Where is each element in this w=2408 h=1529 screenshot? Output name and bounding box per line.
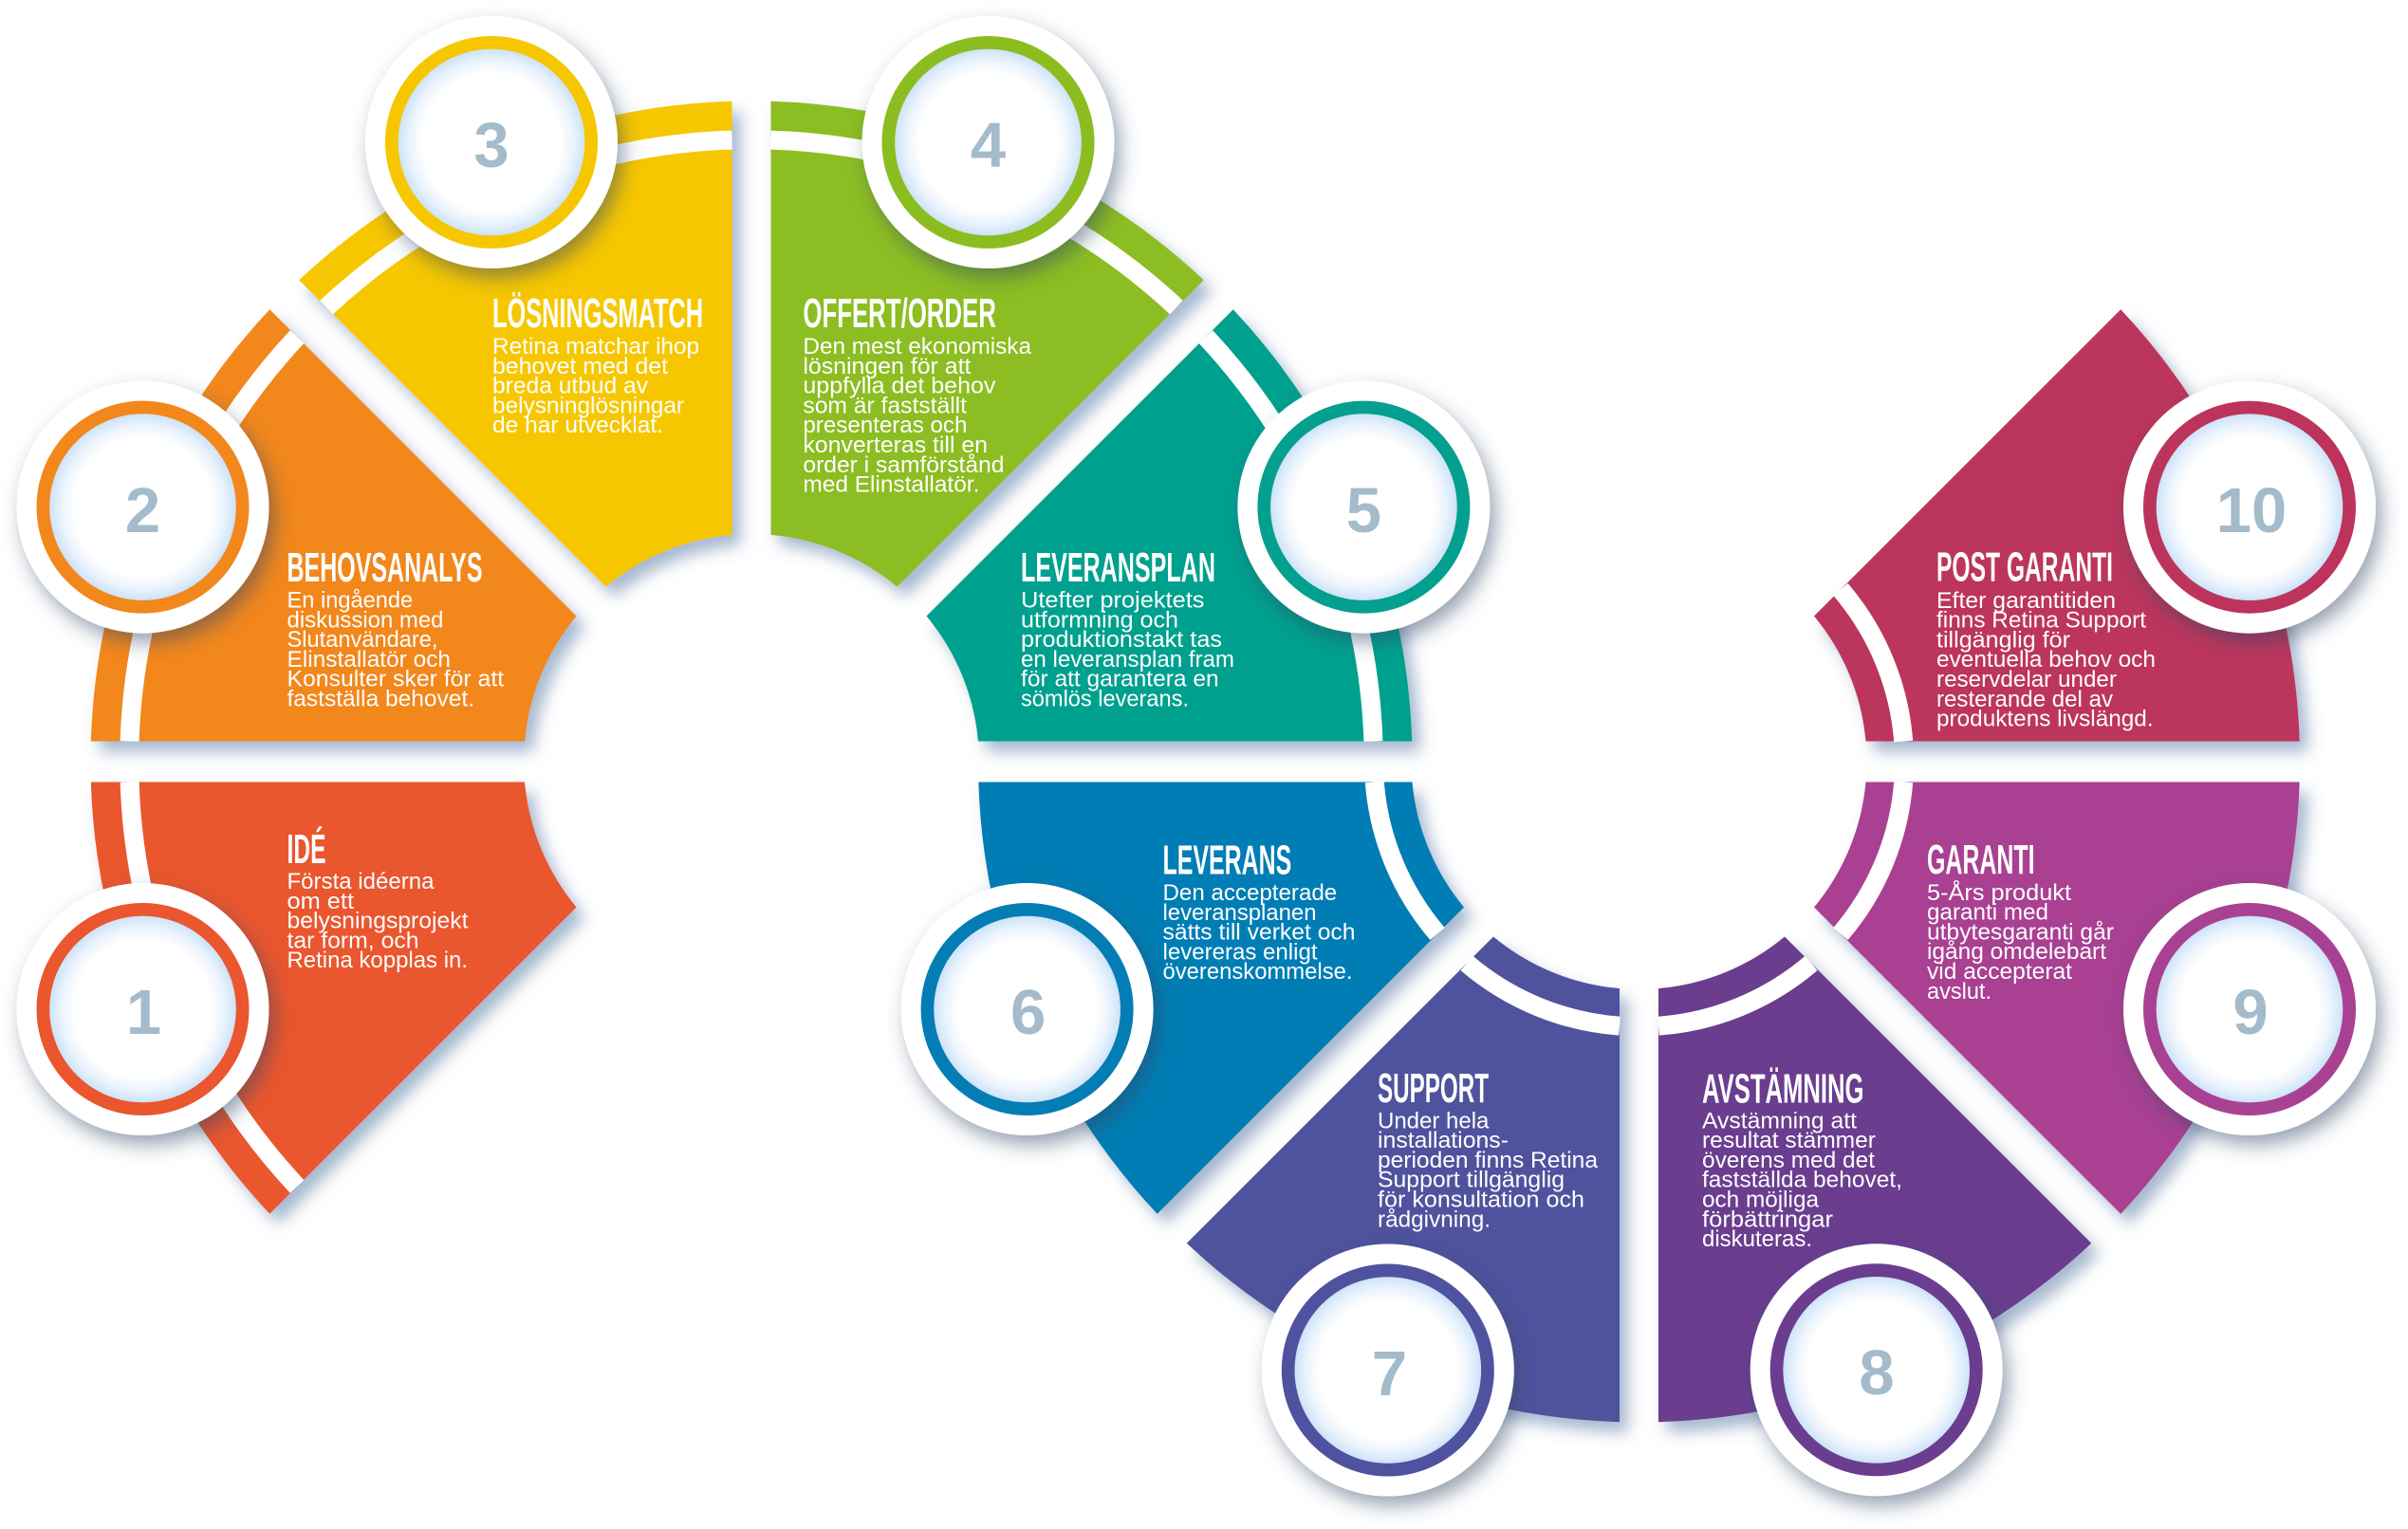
text block: Garanti description: avslut.: [1927, 979, 1991, 1004]
number badge 9: 9: [2232, 977, 2269, 1048]
number badge 10: [2123, 381, 2376, 634]
text block: Idé description: om ett: [287, 889, 354, 914]
text block: Leveransplan description: produktionstakt tas: [1021, 627, 1222, 653]
text block: Leveransplan description: [1021, 588, 1234, 711]
text block: Post Garanti description: finns Retina Support: [1936, 608, 2146, 634]
text block: Lösningsmatch description: breda utbud av: [492, 374, 648, 399]
text block: Lösningsmatch description: Retina matchar ihop: [492, 334, 699, 359]
text block: Leverans description: [1163, 880, 1355, 985]
text block: Avstämning description: Avstämning att: [1702, 1108, 1857, 1133]
text block: Support description: [1378, 1108, 1599, 1232]
text block: Idé description: Retina kopplas in.: [287, 948, 468, 973]
text block: Idé description: Första idéerna: [287, 869, 435, 894]
text block: Leveransplan description: sömlös leverans.: [1021, 687, 1189, 711]
text block: Avstämning description: förbättringar: [1702, 1207, 1833, 1232]
text block: Idé description: tar form, och: [287, 928, 419, 953]
text block: Leverans description: Den accepterade: [1163, 880, 1337, 906]
number badge 10: 10: [2216, 475, 2287, 546]
panel: step 3 Lösningsmatch: [299, 16, 732, 586]
segment: magenta sector: [1814, 782, 2300, 1214]
text block: Support description: Support tillgänglig: [1378, 1168, 1565, 1193]
text block: Post Garanti description: eventuella behov och: [1936, 647, 2156, 672]
segment: indigo sector: [1187, 937, 1620, 1422]
text block: Leveransplan description: en leveransplan fram: [1021, 647, 1234, 672]
heading: Leverans: LEVERANS: [1163, 838, 1291, 884]
text block: Support description: installations-: [1378, 1128, 1509, 1153]
text block: Lösningsmatch description: de har utvecklat.: [492, 413, 663, 438]
text block: Avstämning description: [1702, 1108, 1902, 1252]
heading: Garanti: GARANTI: [1927, 838, 2035, 883]
heading: Offert/Order: OFFERT/ORDER: [803, 291, 996, 337]
text block: Avstämning description: resultat stämmer: [1702, 1128, 1876, 1153]
text block: Offert/Order description: som är fastställt: [803, 393, 967, 418]
panel: step 6 Leverans: [901, 782, 1464, 1214]
text block: Offert/Order description: uppfylla det behov: [803, 374, 995, 399]
segment: teal sector: [926, 309, 1412, 742]
segment: orange sector: [91, 309, 577, 742]
number badge 3: 3: [473, 110, 509, 181]
text block: Post Garanti description: tillgänglig för: [1936, 627, 2070, 653]
text block: Offert/Order description: med Elinstallatör.: [803, 472, 979, 498]
text block: Lösningsmatch description: behovet med det: [492, 354, 668, 379]
number badge 7: [1262, 1244, 1514, 1497]
text block: Garanti description: igång omdelebart: [1927, 939, 2106, 965]
panel: step 10 Post Garanti: [1814, 309, 2376, 742]
number badge 1: [17, 883, 269, 1135]
text block: Support description: Under hela: [1378, 1108, 1490, 1133]
text block: Post Garanti description: [1936, 588, 2156, 732]
text block: Behovsanalys description: Elinstallatör och: [287, 647, 451, 672]
segment: crimson sector: [1814, 309, 2300, 742]
text block: Garanti description: utbytesgaranti går: [1927, 919, 2114, 945]
text block: Behovsanalys description: [287, 588, 504, 711]
heading: Leveransplan: LEVERANSPLAN: [1021, 545, 1215, 591]
text block: Garanti description: vid accepterat: [1927, 959, 2072, 985]
number badge 6: 6: [1010, 977, 1046, 1048]
text block: Avstämning description: fastställda behovet,: [1702, 1168, 1902, 1193]
text block: Support description: för konsultation och: [1378, 1188, 1584, 1212]
number badge 7: 7: [1372, 1338, 1407, 1409]
number badge 4: [861, 16, 1114, 268]
number badge 2: 2: [125, 475, 160, 546]
segment: green sector: [770, 101, 1204, 586]
text block: Offert/Order description: konverteras till en: [803, 433, 988, 458]
text block: Offert/Order description: lösningen för att: [803, 354, 972, 379]
text block: Garanti description: garanti med: [1927, 900, 2048, 926]
segment: red sector: [91, 782, 577, 1214]
heading: Idé: IDÉ: [287, 825, 326, 873]
heading: Avstämning: AVSTÄMNING: [1702, 1066, 1863, 1112]
number badge 3: [365, 16, 618, 268]
text block: Lösningsmatch description: [492, 334, 699, 438]
text block: Leveransplan description: för att garantera en: [1021, 667, 1219, 692]
heading: Behovsanalys: BEHOVSANALYS: [287, 545, 482, 591]
text block: Leveransplan description: utformning och: [1021, 607, 1178, 633]
text block: Behovsanalys description: En ingående: [287, 588, 413, 613]
text block: Offert/Order description: Den mest ekonomiska: [803, 334, 1032, 359]
number badge 6: [901, 883, 1154, 1135]
text block: Avstämning description: överens med det: [1702, 1148, 1875, 1173]
segment: blue sector: [978, 782, 1464, 1214]
heading: Lösningsmatch: LÖSNINGSMATCH: [492, 290, 703, 337]
text block: Idé description: belysningsprojekt: [287, 909, 469, 934]
segment: purple sector: [1658, 937, 2091, 1422]
panel: step 9 Garanti: [1814, 782, 2376, 1214]
text block: Post Garanti description: reservdelar under: [1936, 667, 2117, 692]
text block: Leverans description: levereras enligt: [1163, 939, 1318, 965]
panel: step 4 Offert/Order: [770, 16, 1204, 586]
panel: step 8 Avstämning: [1658, 937, 2091, 1496]
text block: Support description: perioden finns Retina: [1378, 1148, 1599, 1173]
text block: Offert/Order description: presenteras och: [803, 413, 967, 438]
text block: Behovsanalys description: diskussion med: [287, 607, 444, 633]
heading: Support: SUPPORT: [1378, 1066, 1489, 1112]
text block: Behovsanalys description: Slutanvändare,: [287, 627, 438, 653]
text block: Avstämning description: och möjliga: [1702, 1188, 1820, 1212]
text block: Offert/Order description: order i samförstånd: [803, 452, 1004, 478]
panel: step 2 Behovsanalys: [17, 309, 577, 742]
number badge 8: 8: [1859, 1337, 1895, 1409]
text block: Post Garanti description: Efter garantitiden: [1936, 588, 2116, 614]
panel: step 1 Idé: [17, 782, 577, 1214]
number badge 4: 4: [971, 110, 1006, 181]
text block: Leverans description: sätts till verket och: [1163, 920, 1355, 946]
number badge 2: [17, 381, 269, 634]
text block: Leveransplan description: Utefter projektets: [1021, 588, 1205, 613]
text block: Post Garanti description: resterande del av: [1936, 687, 2113, 712]
text block: Behovsanalys description: fastställa behovet.: [287, 687, 474, 711]
text block: Leverans description: överenskommelse.: [1163, 959, 1353, 985]
text block: Garanti description: [1927, 879, 2114, 1004]
panel: step 7 Support: [1187, 937, 1620, 1497]
text block: Post Garanti description: produktens livslängd.: [1936, 707, 2154, 732]
text block: Lösningsmatch description: belysninglösningar: [492, 393, 684, 418]
number badge 5: [1237, 381, 1490, 634]
number badge 5: 5: [1346, 475, 1381, 546]
heading: Post Garanti: POST GARANTI: [1936, 544, 2113, 590]
segment: yellow sector: [299, 101, 732, 586]
panel: step 5 Leveransplan: [926, 309, 1490, 742]
text block: Behovsanalys description: Konsulter sker för att: [287, 667, 504, 692]
text block: Support description: rådgivning.: [1378, 1207, 1491, 1232]
text block: Avstämning description: diskuteras.: [1702, 1226, 1812, 1252]
text block: Leverans description: leveransplanen: [1163, 900, 1317, 926]
number badge 8: [1750, 1243, 2003, 1496]
text block: Garanti description: 5-Års produkt: [1927, 879, 2071, 906]
text block: Offert/Order description: [803, 334, 1032, 498]
text block: Idé description: [287, 869, 469, 973]
number badge 1: 1: [126, 977, 161, 1048]
number badge 9: [2123, 883, 2376, 1135]
